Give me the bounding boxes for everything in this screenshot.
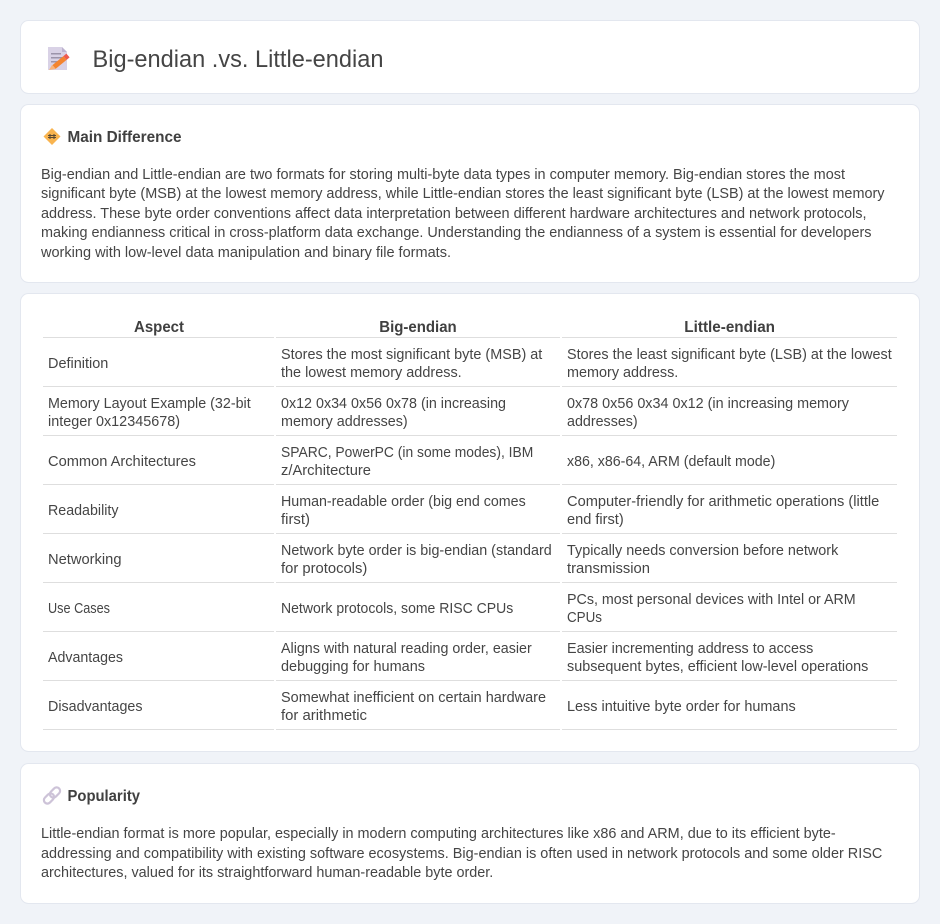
table row: common architectures: SPARC, PowerPC (in some modes), IBM: [281, 445, 533, 461]
table row: definition: memory address.: [567, 365, 678, 381]
text block: main difference paragraph: making endianness critical in cross-platform data exchange. Understanding the endianness of a system is essential for developers: [41, 225, 872, 241]
text block: main difference paragraph: address. These byte order conventions affect data interpretation between different hardware architectures and network protocols,: [41, 206, 866, 222]
table header row: Big-endian: [379, 319, 457, 336]
icon: chain link: [42, 786, 62, 805]
panel: main difference: [20, 104, 920, 282]
text block: main difference paragraph: working with low-level data manipulation and binary file formats.: [40, 245, 451, 261]
table header row: [43, 319, 897, 338]
table row: definition: [43, 347, 897, 387]
table row: memory layout example: addresses): [567, 414, 638, 430]
table row: use cases: CPUs: [567, 610, 602, 626]
heading: popularity: Popularity: [68, 788, 140, 805]
table row: use cases: Use Cases: [48, 601, 110, 617]
table row: disadvantages: Less intuitive byte order for humans: [567, 699, 796, 715]
text block: main difference paragraph: significant byte (MSB) at the lowest memory address, while Little-endian stores the least significant byte (LSB) at the lowest memory: [41, 186, 885, 202]
text block: popularity paragraph: addressing and compatibility with existing software ecosystems. Big-endian is often used in network protocols and some older RISC: [41, 846, 882, 862]
table row: memory layout example: Memory Layout Example (32-bit: [48, 396, 251, 412]
panel: comparison table: [20, 294, 920, 752]
table row: definition: Stores the most significant byte (MSB) at: [281, 347, 542, 363]
table row: advantages: Advantages: [48, 650, 123, 666]
text block: popularity paragraph: architectures, valued for its straightforward human-readable byte order.: [41, 865, 493, 881]
table row: memory layout example: memory addresses): [281, 414, 408, 430]
table header row: Little-endian: [684, 319, 775, 336]
table header row: Aspect: [134, 319, 185, 336]
table row: disadvantages: Disadvantages: [48, 699, 142, 715]
table row: memory layout example: integer 0x12345678): [48, 414, 180, 430]
table row: networking: Typically needs conversion before network: [567, 543, 839, 559]
text block: popularity paragraph: [41, 826, 882, 881]
table row: disadvantages: [43, 690, 897, 730]
table row: use cases: PCs, most personal devices with Intel or ARM: [567, 592, 856, 608]
table row: common architectures: x86, x86-64, ARM (default mode): [567, 454, 775, 470]
table row: networking: for protocols): [281, 561, 367, 577]
table row: readability: Human-readable order (big end comes: [281, 494, 526, 510]
table row: definition: Definition: [48, 356, 108, 372]
table row: common architectures: z/Architecture: [281, 463, 371, 479]
table row: advantages: Aligns with natural reading order, easier: [281, 641, 532, 657]
table row: networking: Network byte order is big-endian (standard: [281, 543, 552, 559]
icon: warning diamond: [44, 128, 60, 145]
table row: memory layout example: [43, 396, 897, 436]
panel: popularity: [20, 764, 920, 904]
text block: main difference paragraph: Big-endian and Little-endian are two formats for storing multi-byte data types in computer memory. Big-endian stores the most: [41, 167, 845, 183]
heading: main difference: Main Difference: [68, 129, 182, 146]
table row: memory layout example: 0x78 0x56 0x34 0x12 (in increasing memory: [567, 396, 850, 412]
text block: main difference paragraph: [40, 167, 885, 261]
table row: advantages: subsequent bytes, efficient low-level operations: [567, 659, 868, 675]
table row: networking: [43, 543, 897, 583]
table row: readability: end first): [567, 512, 624, 528]
table row: definition: the lowest memory address.: [281, 365, 462, 381]
table row: readability: [43, 494, 897, 534]
panel: title header: [20, 20, 920, 94]
table row: use cases: [43, 592, 897, 632]
table row: advantages: debugging for humans: [281, 659, 425, 675]
table row: readability: Computer-friendly for arithmetic operations (little: [567, 494, 879, 510]
table row: use cases: Network protocols, some RISC CPUs: [281, 601, 513, 617]
icon: memo with pencil: [48, 47, 68, 70]
table row: advantages: [43, 641, 897, 681]
table row: advantages: Easier incrementing address to access: [567, 641, 813, 657]
table row: disadvantages: for arithmetic: [281, 708, 367, 724]
table row: readability: first): [281, 512, 310, 528]
table row: networking: Networking: [48, 552, 122, 568]
table row: disadvantages: Somewhat inefficient on certain hardware: [281, 690, 546, 706]
title: Big-endian .vs. Little-endian: [92, 46, 384, 73]
table row: networking: transmission: [567, 561, 650, 577]
table row: common architectures: Common Architectures: [48, 454, 196, 470]
text block: popularity paragraph: Little-endian format is more popular, especially in modern computing architectures like x86 and ARM, due to its efficient byte-: [41, 826, 836, 842]
table row: definition: Stores the least significant byte (LSB) at the lowest: [567, 347, 892, 363]
table row: readability: Readability: [48, 503, 119, 519]
table row: common architectures: [43, 445, 897, 485]
table row: memory layout example: 0x12 0x34 0x56 0x78 (in increasing: [281, 396, 506, 412]
